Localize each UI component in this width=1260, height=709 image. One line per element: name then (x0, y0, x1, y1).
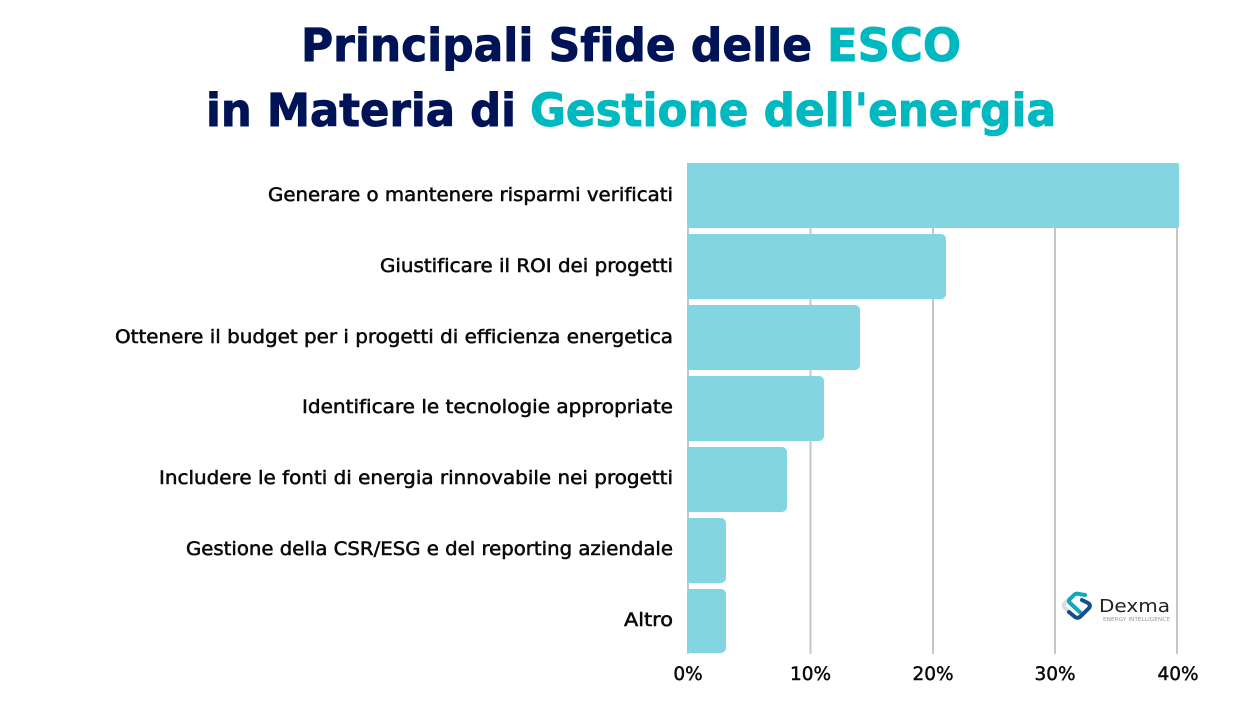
bar: Altro (687, 589, 726, 653)
wordmark: Dexma (1099, 596, 1170, 617)
title: Gestione dell'energia (530, 84, 1056, 137)
category labels: Gestione della CSR/ESG e del reporting aziendale (186, 538, 673, 560)
axis labels: 30% (1034, 664, 1076, 685)
bar: Gestione della CSR/ESG (687, 518, 726, 583)
logo: Dexma (1064, 594, 1170, 623)
bar: Giustificare il ROI dei progetti (687, 234, 946, 299)
tagline: ENERGY INTELLIGENCE (1103, 617, 1170, 623)
bar: Includere le fonti (687, 447, 787, 512)
title: in Materia di (206, 84, 516, 137)
category labels: Ottenere il budget per i progetti di efficienza energetica (115, 326, 673, 348)
icon: Dexma mark (1064, 594, 1090, 618)
category labels: Giustificare il ROI dei progetti (380, 255, 673, 277)
title (206, 19, 1056, 137)
axis labels: 0% (673, 664, 703, 685)
title: Principali Sfide delle (301, 19, 812, 72)
bar: Ottenere il budget (687, 305, 860, 370)
category labels: Generare o mantenere risparmi verificati (268, 184, 673, 206)
category labels: Identificare le tecnologie appropriate (302, 396, 673, 418)
axis labels: 20% (912, 664, 954, 685)
axis labels: 40% (1157, 664, 1199, 685)
category labels: Includere le fonti di energia rinnovabile nei progetti (159, 467, 673, 489)
category labels: Altro (624, 609, 673, 631)
title: ESCO (827, 19, 961, 72)
bar chart (687, 163, 1179, 653)
bar: Generare o mantenere risparmi verificati (687, 163, 1179, 228)
axis labels (673, 664, 1199, 685)
bar: Identificare le tecnologie (687, 376, 824, 441)
axis labels: 10% (790, 664, 831, 685)
category labels (115, 184, 673, 631)
